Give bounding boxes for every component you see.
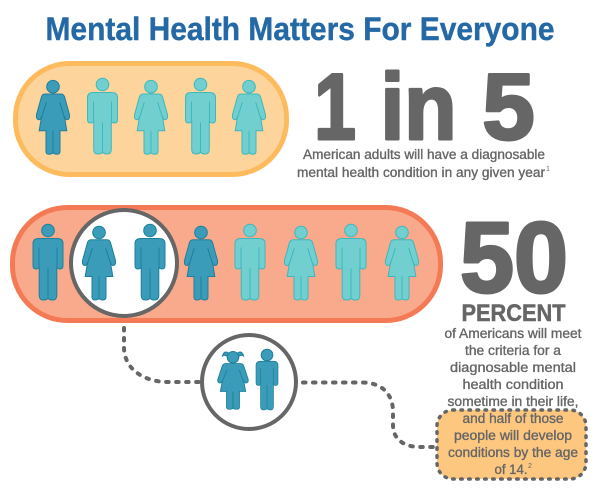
icon: woman xyxy=(284,226,318,300)
big stat: 1 in 5 xyxy=(314,54,535,160)
text: 50 percent description: diagnosable mental xyxy=(450,360,576,375)
icon: man xyxy=(33,224,63,300)
icon: woman xyxy=(184,226,218,300)
icon: woman highlighted xyxy=(36,80,70,154)
icon: man xyxy=(88,78,118,154)
text: 50 percent description: and half of those xyxy=(462,411,564,426)
icon: woman in circle xyxy=(82,226,116,300)
icon: boy xyxy=(256,349,278,410)
icon: woman xyxy=(232,80,266,154)
big stat: 1 in 5: in xyxy=(380,54,456,159)
dotted connector: pill to child circle xyxy=(124,328,200,382)
child circle xyxy=(202,335,296,429)
text: 50 percent description: 2 xyxy=(528,463,532,470)
heading: percent: PERCENT xyxy=(462,300,566,327)
text: 50 percent description: sometime in their life, xyxy=(448,394,578,409)
icon: man xyxy=(336,224,366,300)
title: Mental Health Matters For Everyone xyxy=(46,11,554,47)
text: 50 percent description: people will develop xyxy=(454,428,572,443)
icon: girl xyxy=(218,352,248,409)
text: 1 in 5 description xyxy=(297,147,550,180)
icon: woman xyxy=(385,226,419,300)
panel: 1 in 5 pill xyxy=(16,64,286,174)
big stat: 50: 50 xyxy=(460,202,568,314)
callout box xyxy=(437,410,586,479)
icon: man xyxy=(186,78,216,154)
text: 1 in 5 description: American adults will have a diagnosable xyxy=(303,147,545,162)
text: 50 percent description: of 14. xyxy=(494,462,528,477)
text: 1 in 5 description: mental health condition in any given year xyxy=(297,165,546,180)
icon: man in circle xyxy=(135,224,165,300)
dotted connector: child circle to callout xyxy=(303,382,434,447)
text: 50 percent description: the criteria for a xyxy=(465,343,561,358)
highlight circle xyxy=(71,210,177,316)
text: 1 in 5 description: 1 xyxy=(546,166,550,173)
panel: 50 percent pill xyxy=(12,208,440,320)
big stat: 1 in 5: 5 xyxy=(482,54,535,159)
text: 50 percent description: conditions by the age xyxy=(448,445,578,460)
text: 50 percent description: health condition xyxy=(462,377,564,392)
text: 50 percent description: of Americans will meet xyxy=(444,326,582,341)
text: 50 percent description xyxy=(444,326,582,477)
big stat: 1 in 5: 1 xyxy=(314,55,356,160)
icon: man xyxy=(235,224,265,300)
icon: woman xyxy=(134,80,168,154)
